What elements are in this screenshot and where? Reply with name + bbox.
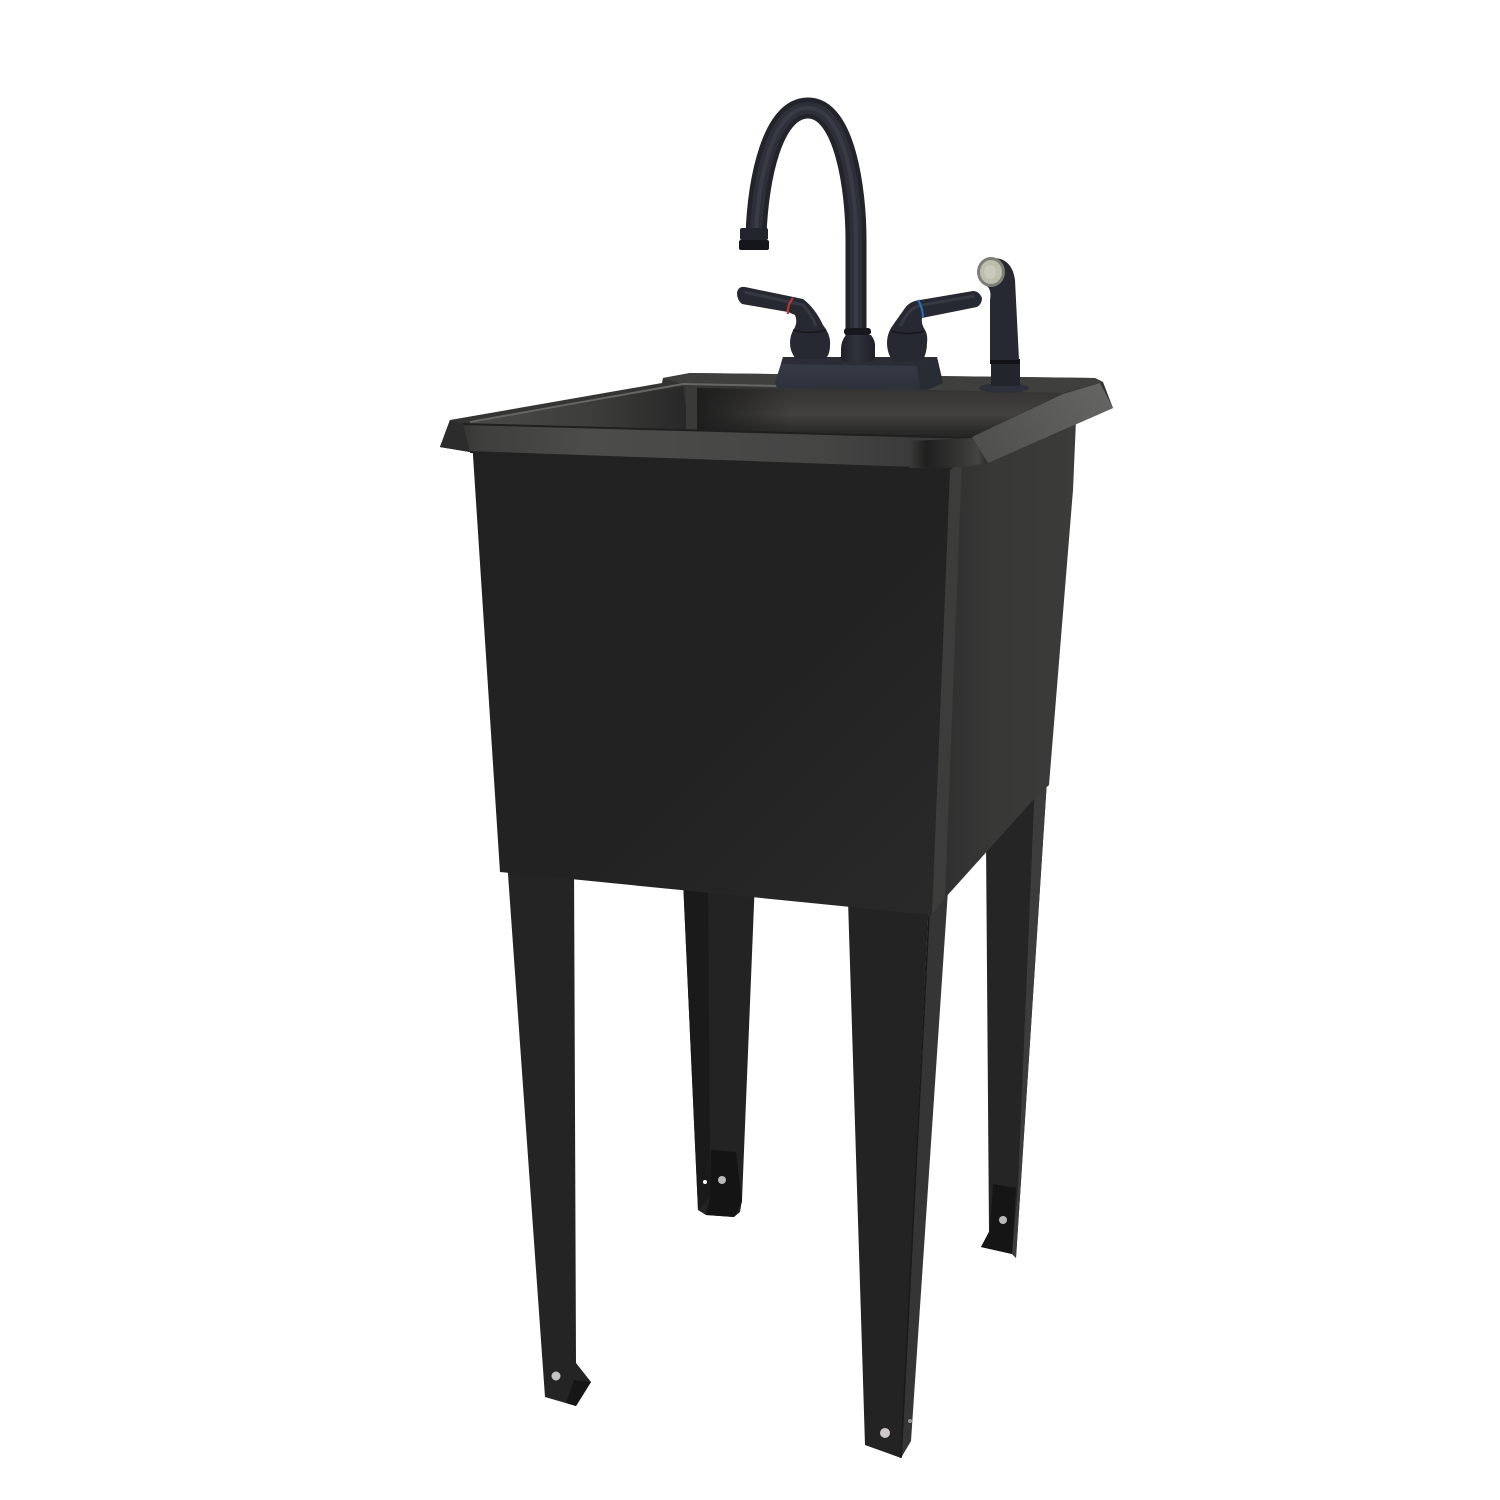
right handle with blue ring — [887, 291, 982, 362]
back inner wall — [689, 388, 1063, 437]
faucet — [737, 108, 1029, 393]
spout collar and centre base — [841, 328, 875, 362]
right rim band — [972, 383, 1113, 463]
back inner corner shadow — [697, 388, 790, 433]
rim corner — [910, 438, 988, 468]
gooseneck spout — [739, 108, 856, 340]
front rim bottom line — [470, 452, 915, 468]
leg: front right — [848, 890, 948, 1458]
tub: front face — [472, 440, 962, 915]
left handle with red ring — [737, 287, 830, 359]
front rim top line — [463, 424, 972, 438]
front rim band — [440, 420, 972, 468]
tub: side face — [932, 420, 1076, 915]
leg: back centre — [683, 880, 755, 1217]
sink rim — [440, 373, 1113, 468]
side sprayer — [977, 257, 1029, 393]
inner corner column — [686, 386, 697, 431]
back rim deck — [663, 373, 1103, 393]
rim ridge highlight — [470, 384, 780, 422]
leg: back right — [981, 780, 1047, 1258]
left inner wall — [465, 386, 689, 431]
leg: front left — [507, 860, 591, 1406]
rim left tip — [440, 420, 470, 452]
tub: front right corner highlight — [932, 460, 962, 915]
deck plate — [775, 357, 943, 390]
rim outline — [440, 373, 1113, 468]
